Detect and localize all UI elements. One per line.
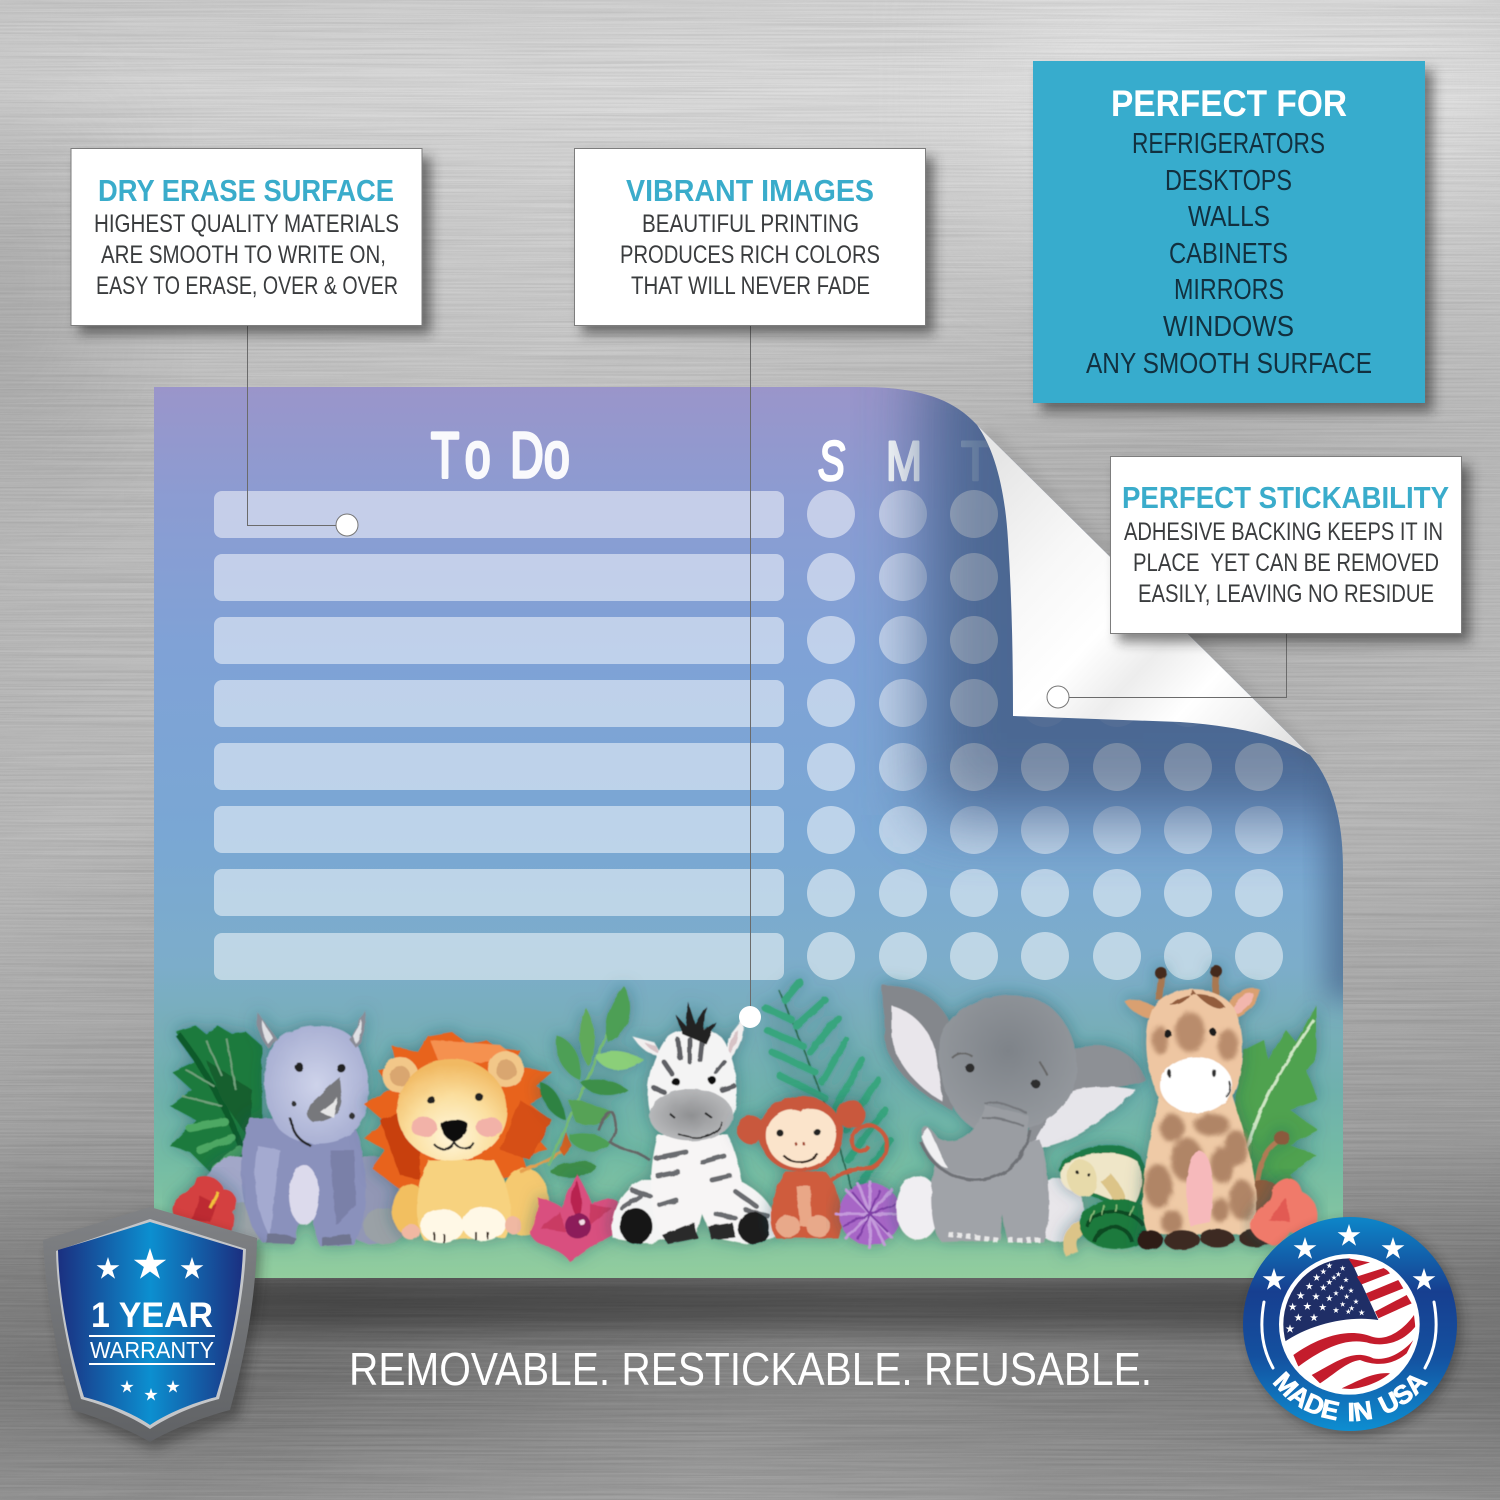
tagline: REMOVABLE. RESTICKABLE. REUSABLE. <box>349 1343 1152 1395</box>
green branch <box>540 986 650 1177</box>
callout: dry erase surface <box>71 148 431 334</box>
callout body: ARE SMOOTH TO WRITE ON, <box>101 241 386 269</box>
peel shadow on metal <box>985 430 1315 760</box>
callout body <box>620 210 880 300</box>
shield top stars <box>97 1248 203 1279</box>
callout body: THAT WILL NEVER FADE <box>631 272 870 300</box>
callout body: PRODUCES RICH COLORS <box>620 241 880 269</box>
badge disc <box>1243 1217 1457 1431</box>
callout body: BEAUTIFUL PRINTING <box>642 210 859 238</box>
white flap backing <box>977 425 1310 755</box>
badge stars <box>1263 1224 1435 1290</box>
red hibiscus <box>172 1176 236 1236</box>
monstera leaf <box>170 1026 262 1176</box>
shield face <box>58 1222 243 1425</box>
surface list: ANY SMOOTH SURFACE <box>1086 348 1372 380</box>
shaded dot highlights <box>950 490 1283 791</box>
sheet cast shadow <box>170 1275 1345 1330</box>
pink orchid <box>530 1174 618 1262</box>
jungle animal illustration <box>170 965 1318 1262</box>
warranty shield badge <box>43 1207 261 1449</box>
zebra <box>612 1002 778 1244</box>
surface list: DESKTOPS <box>1165 165 1292 197</box>
callout body: EASILY, LEAVING NO RESIDUE <box>1138 580 1434 608</box>
callout: vibrant images <box>574 148 934 334</box>
warranty text: WARRANTY <box>90 1337 214 1363</box>
day headers <box>818 440 989 482</box>
chart sheet <box>154 387 1343 1278</box>
callout heading: PERFECT STICKABILITY <box>1122 480 1449 515</box>
callout: perfect for <box>1033 61 1433 412</box>
callout body <box>94 210 399 300</box>
made in usa text: MADE IN USA <box>1272 1371 1428 1422</box>
callout heading: VIBRANT IMAGES <box>626 173 874 208</box>
shield bottom stars <box>120 1380 180 1401</box>
palm frond <box>765 982 890 1190</box>
lion <box>364 1032 572 1243</box>
sheet background <box>154 387 1343 1278</box>
1 year text: 1 YEAR <box>91 1296 213 1335</box>
callout body: PLACE YET CAN BE REMOVED <box>1133 549 1439 577</box>
pointer dots <box>336 514 1069 1028</box>
badge side arcs <box>1262 1302 1436 1368</box>
monkey <box>737 1096 887 1238</box>
callout body: EASY TO ERASE, OVER & OVER <box>96 272 398 300</box>
day headers: T <box>961 429 990 492</box>
giraffe <box>1125 965 1290 1250</box>
rhino <box>202 1011 407 1246</box>
surface list <box>1086 128 1372 380</box>
purple flower <box>836 1182 902 1248</box>
callout body <box>1124 518 1443 608</box>
day headers: M <box>886 429 922 492</box>
warranty rule <box>89 1336 215 1364</box>
cobra <box>1058 1145 1155 1254</box>
surface list: WINDOWS <box>1163 311 1294 343</box>
callout body: HIGHEST QUALITY MATERIALS <box>94 210 399 238</box>
made in usa badge <box>1243 1214 1466 1440</box>
elephant <box>882 985 1146 1242</box>
curl shading <box>925 340 1420 1000</box>
callout heading: DRY ERASE SURFACE <box>98 173 394 208</box>
surface list: CABINETS <box>1169 238 1288 270</box>
day headers: S <box>818 429 845 492</box>
coral hibiscus <box>1250 1179 1317 1246</box>
waving flag <box>1279 1254 1420 1395</box>
callout: perfect stickability <box>1110 456 1470 642</box>
surface list: WALLS <box>1188 201 1270 233</box>
callout heading: PERFECT FOR <box>1111 83 1347 124</box>
heading: To Do: To Do <box>431 420 570 491</box>
checkbox dots <box>807 490 1283 980</box>
surface list: MIRRORS <box>1174 274 1284 306</box>
to-do rows <box>214 491 784 980</box>
giraffe background leaf <box>1232 1005 1318 1190</box>
peeled corner flap <box>977 425 1315 760</box>
surface list: REFRIGERATORS <box>1132 128 1325 160</box>
shield frame <box>43 1207 257 1442</box>
leader lines <box>248 325 1286 1007</box>
